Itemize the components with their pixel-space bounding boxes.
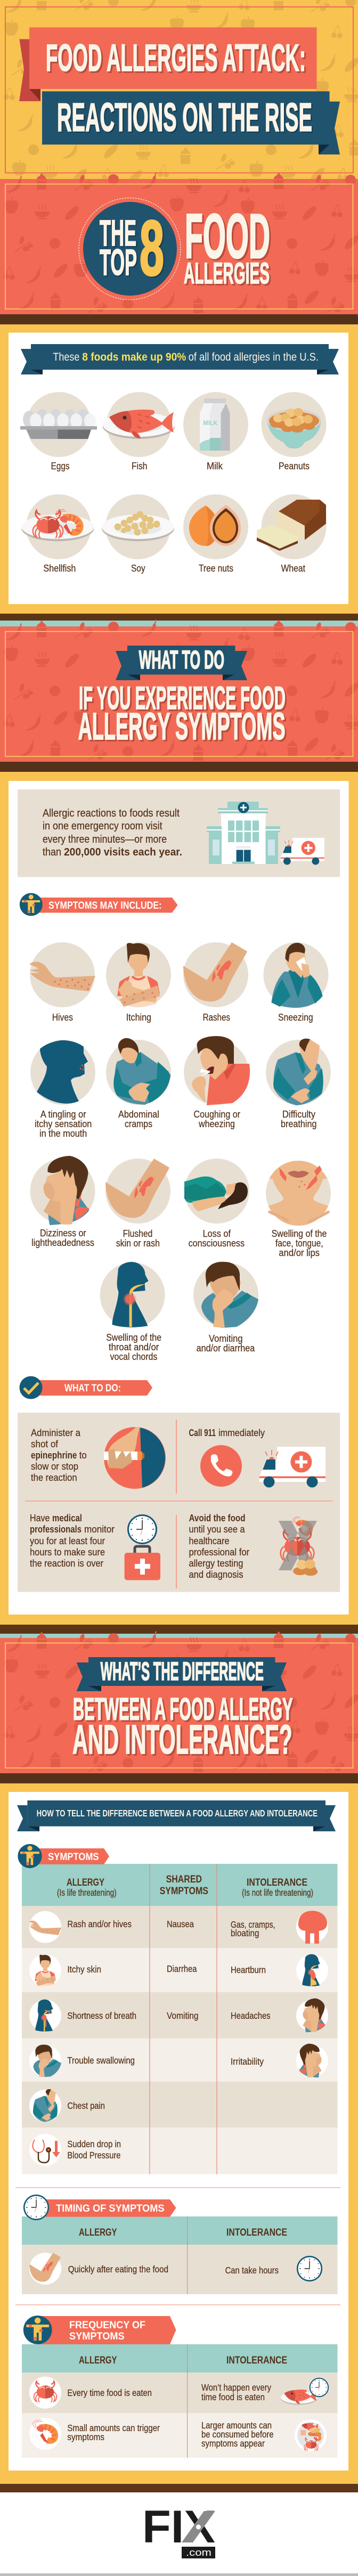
symptom: swelling of throat: vocal chords [110, 1351, 157, 1362]
stat text [43, 807, 182, 858]
logo: fix.com: FIX [142, 2501, 215, 2553]
tag: frequency of symptoms: FREQUENCY OF [69, 2319, 145, 2331]
stat text: 200,000 visits each year. [64, 846, 182, 858]
row: amounts: symptoms appear [201, 2438, 265, 2449]
panel: difference header [0, 1631, 358, 1773]
action: medical monitoring [30, 1513, 160, 1580]
food grid: eggs [20, 392, 97, 471]
symptom: swelling of face: Swelling of the [272, 1228, 327, 1239]
symptom: tingling mouth: A tingling or [40, 1109, 86, 1120]
row: rash, nausea, gas: Gas, cramps, [231, 1919, 275, 1930]
table: timing of symptoms: ALLERGY [79, 2227, 117, 2238]
row: shortness of breath, vomiting, headaches: Headaches [231, 2010, 271, 2021]
food grid: peanuts [262, 392, 327, 471]
tag: timing of symptoms [23, 2195, 176, 2220]
action: call 911: immediately [218, 1428, 265, 1438]
symptom: difficulty breathing: breathing [281, 1119, 316, 1129]
action: avoid the food: professional for [189, 1547, 249, 1558]
row: itchy skin, diarrhea, heartburn: Heartburn [231, 1964, 266, 1975]
action: call 911 [189, 1428, 326, 1487]
ribbon: 8 foods make up 90%: 8 foods make up 90% [82, 351, 186, 363]
symptom: swelling of face: and/or lips [279, 1248, 320, 1258]
symptom: rashes [183, 942, 248, 1023]
table: frequency of symptoms: INTOLERANCE [226, 2354, 287, 2366]
food grid: wheat: Wheat [281, 563, 305, 574]
table header: intolerance [242, 1877, 313, 1898]
row: trouble swallowing, irritability: Irritability [231, 2056, 264, 2067]
symptom: hives: Hives [52, 1012, 73, 1023]
symptom: sneezing [263, 942, 328, 1023]
tag: symptoms table tag [18, 1844, 109, 1868]
row: every time: Every time food is eaten [67, 2387, 152, 2398]
food grid: fish [103, 392, 175, 471]
food grid: milk [183, 392, 248, 471]
symptom: swelling of face: face, tongue, [275, 1238, 323, 1249]
table header: allergy: ALLERGY [67, 1877, 104, 1888]
symptom: sneezing: Sneezing [278, 1012, 313, 1023]
heading: allergies: ALLERGIES [184, 256, 270, 290]
action: medical monitoring: professionals [30, 1524, 82, 1535]
table header: allergy [57, 1877, 117, 1898]
food grid: milk: MILK [204, 419, 218, 427]
heading: number 8: 8 [140, 205, 164, 291]
action: medical monitoring: monitor [84, 1524, 115, 1535]
symptom: tingling mouth: itchy sensation [35, 1119, 92, 1129]
symptom: vomiting: Vomiting [209, 1333, 243, 1344]
action: epinephrine: shot of [31, 1439, 59, 1449]
table: frequency of symptoms: ALLERGY [79, 2354, 117, 2366]
action: epinephrine: slow or stop [31, 1461, 78, 1472]
symptom: loss of consciousness [184, 1159, 249, 1249]
row: amounts: Larger amounts can [201, 2420, 272, 2431]
row: shortness of breath, vomiting, headaches: Shortness of breath [67, 2010, 136, 2021]
action: epinephrine [31, 1427, 166, 1489]
food grid: shellfish: Shellfish [43, 563, 76, 574]
row: rash, nausea, gas: bloating [231, 1928, 259, 1938]
action: avoid the food: healthcare [189, 1536, 229, 1546]
panel: emergency statistic [18, 789, 340, 877]
table header: intolerance: INTOLERANCE [247, 1877, 307, 1888]
symptom: abdominal cramps: Abdominal [118, 1109, 159, 1120]
table: timing of symptoms [22, 2216, 338, 2294]
table: timing of symptoms: Quickly after eating the food [68, 2264, 168, 2275]
symptom: coughing: Coughing or [194, 1109, 240, 1120]
symptom: flushed skin: Flushed [123, 1228, 152, 1239]
action: medical monitoring: you for at least four [30, 1536, 105, 1546]
icon: ambulance [281, 838, 324, 865]
symptom: dizziness: Dizziness or [40, 1228, 86, 1238]
icon: hospital [207, 802, 280, 864]
row: rash, nausea, gas [29, 1911, 328, 1944]
panel: what to do header [0, 619, 358, 762]
row: chest pain [29, 2089, 105, 2122]
action: avoid the food: allergy testing [189, 1558, 243, 1569]
row: amounts: Small amounts can trigger [67, 2423, 160, 2433]
row: rash, nausea, gas: Rash and/or hives [67, 1919, 132, 1929]
symptom: tingling mouth: in the mouth [39, 1128, 87, 1139]
row: every time: Won’t happen every [201, 2382, 271, 2393]
row: blood pressure: Blood Pressure [67, 2150, 120, 2161]
table header: allergy: (Is life threatening) [57, 1887, 117, 1898]
table: timing of symptoms: INTOLERANCE [226, 2227, 287, 2238]
row: trouble swallowing, irritability: Trouble swallowing [67, 2055, 135, 2066]
table header: intolerance: (Is not life threatening) [242, 1887, 313, 1898]
tag: symptoms table tag: SYMPTOMS [48, 1851, 99, 1863]
row: itchy skin, diarrhea, heartburn: Diarrhea [167, 1963, 197, 1974]
tag: frequency of symptoms: SYMPTOMS [69, 2330, 125, 2342]
symptom: itching [106, 942, 171, 1023]
tag: what to do: WHAT TO DO: [64, 1382, 121, 1394]
food grid: fish: Fish [132, 461, 147, 471]
row: amounts: be consumed before [201, 2429, 274, 2440]
table header: shared symptoms [160, 1873, 208, 1897]
symptom: difficulty breathing: Difficulty [282, 1109, 315, 1120]
symptom: coughing [184, 1036, 250, 1129]
food grid: soy: Soy [131, 563, 145, 574]
table header: shared symptoms: SHARED [166, 1873, 202, 1885]
ribbon: 8 foods make up 90% [21, 344, 339, 374]
action: epinephrine: Administer a [31, 1428, 81, 1438]
action: epinephrine: epinephrine [31, 1450, 77, 1461]
food grid: eggs: Eggs [51, 461, 70, 471]
symptom: dizziness: lightheadedness [31, 1237, 94, 1248]
table: timing of symptoms: Can take hours [225, 2265, 279, 2276]
row: blood pressure: Sudden drop in [67, 2139, 121, 2149]
stat text: than [43, 846, 61, 858]
ribbon: what's the difference [77, 1657, 287, 1691]
symptom: abdominal cramps [106, 1038, 171, 1129]
row: itchy skin, diarrhea, heartburn [29, 1954, 328, 1986]
ribbon: what to do: WHAT TO DO [139, 646, 224, 674]
ribbon: what to do [116, 646, 247, 680]
action: medical monitoring: the reaction is over [30, 1558, 103, 1569]
panel: what to do actions [18, 1413, 340, 1592]
symptom: itching: Itching [126, 1012, 151, 1023]
row: shortness of breath, vomiting, headaches: Vomiting [167, 2010, 198, 2021]
action: call 911: Call 911 [189, 1428, 216, 1438]
symptom: hives [29, 942, 95, 1023]
symptom: loss of consciousness: Loss of [203, 1228, 231, 1239]
action: epinephrine: the reaction [31, 1472, 77, 1483]
row: trouble swallowing, irritability [29, 2044, 328, 2077]
ribbon: 8 foods make up 90%: These [53, 351, 79, 363]
stat text: every three minutes—or more [43, 833, 167, 845]
symptom: abdominal cramps: cramps [125, 1119, 152, 1129]
ribbon: 8 foods make up 90%: of all food allergies in the U.S. [189, 351, 319, 363]
food grid: tree nuts: Tree nuts [199, 563, 233, 574]
tag: frequency of symptoms [23, 2316, 176, 2344]
table: symptoms comparison [22, 1864, 338, 2174]
panel: top 8 food allergies header [0, 172, 358, 314]
row: shortness of breath, vomiting, headaches [29, 1999, 328, 2032]
action: medical monitoring: medical [52, 1513, 82, 1523]
symptom: swelling of face [266, 1161, 331, 1258]
symptom: vomiting: and/or diarrhea [197, 1343, 255, 1354]
tag: timing of symptoms: TIMING OF SYMPTOMS [56, 2203, 165, 2214]
ribbon: how to tell the difference [17, 1800, 336, 1831]
row: amounts: symptoms [67, 2432, 104, 2442]
symptom: flushed skin [105, 1159, 170, 1249]
symptom: loss of consciousness: consciousness [189, 1238, 245, 1249]
table header: shared symptoms: SYMPTOMS [160, 1885, 208, 1897]
symptom: swelling of throat: Swelling of the [106, 1332, 161, 1343]
food grid: peanuts: Peanuts [279, 461, 310, 471]
symptom: dizziness [30, 1156, 95, 1248]
logo: fix.com: .com [186, 2547, 211, 2558]
symptom: swelling of throat [100, 1262, 165, 1362]
symptom: rashes: Rashes [203, 1012, 230, 1023]
symptom: tingling mouth [30, 1040, 95, 1139]
action: avoid the food: until you see a [189, 1524, 245, 1535]
food grid: shellfish [21, 494, 94, 574]
symptom: flushed skin: skin or rash [116, 1238, 160, 1249]
row: every time [29, 2377, 329, 2409]
action: avoid the food [189, 1513, 318, 1580]
panel: top 8 food allergies header: TOP [100, 242, 137, 283]
row: itchy skin, diarrhea, heartburn: Itchy skin [67, 1964, 101, 1975]
symptom: coughing: wheezing [198, 1119, 235, 1129]
tag: what to do [19, 1376, 152, 1399]
table: frequency of symptoms [22, 2344, 338, 2458]
symptom: vomiting [193, 1262, 258, 1354]
row: rash, nausea, gas: Nausea [167, 1919, 194, 1929]
food grid: wheat [257, 494, 327, 574]
food grid: milk: Milk [207, 461, 223, 471]
symptom: swelling of throat: throat and/or [109, 1342, 159, 1352]
row: every time: time food is eaten [201, 2392, 265, 2402]
row: blood pressure [29, 2134, 121, 2166]
tag: symptoms may include [20, 893, 178, 916]
action: medical monitoring: hours to make sure [30, 1547, 105, 1558]
symptom: difficulty breathing [266, 1039, 331, 1129]
action: epinephrine: to [79, 1450, 87, 1461]
tag: symptoms may include: SYMPTOMS MAY INCLUDE: [48, 900, 162, 911]
action: avoid the food: and diagnosis [189, 1569, 243, 1580]
heading: the top: THE [100, 213, 136, 254]
action: medical monitoring: Have [30, 1513, 50, 1523]
action: avoid the food: Avoid the food [189, 1513, 245, 1523]
food grid: tree nuts [183, 494, 248, 574]
panel: title banner [4, 0, 358, 186]
stat text: Allergic reactions to foods result [43, 807, 180, 819]
row: chest pain: Chest pain [67, 2100, 105, 2111]
food grid: soy [102, 494, 174, 574]
stat text: in one emergency room visit [43, 820, 162, 832]
row: amounts [29, 2418, 327, 2451]
